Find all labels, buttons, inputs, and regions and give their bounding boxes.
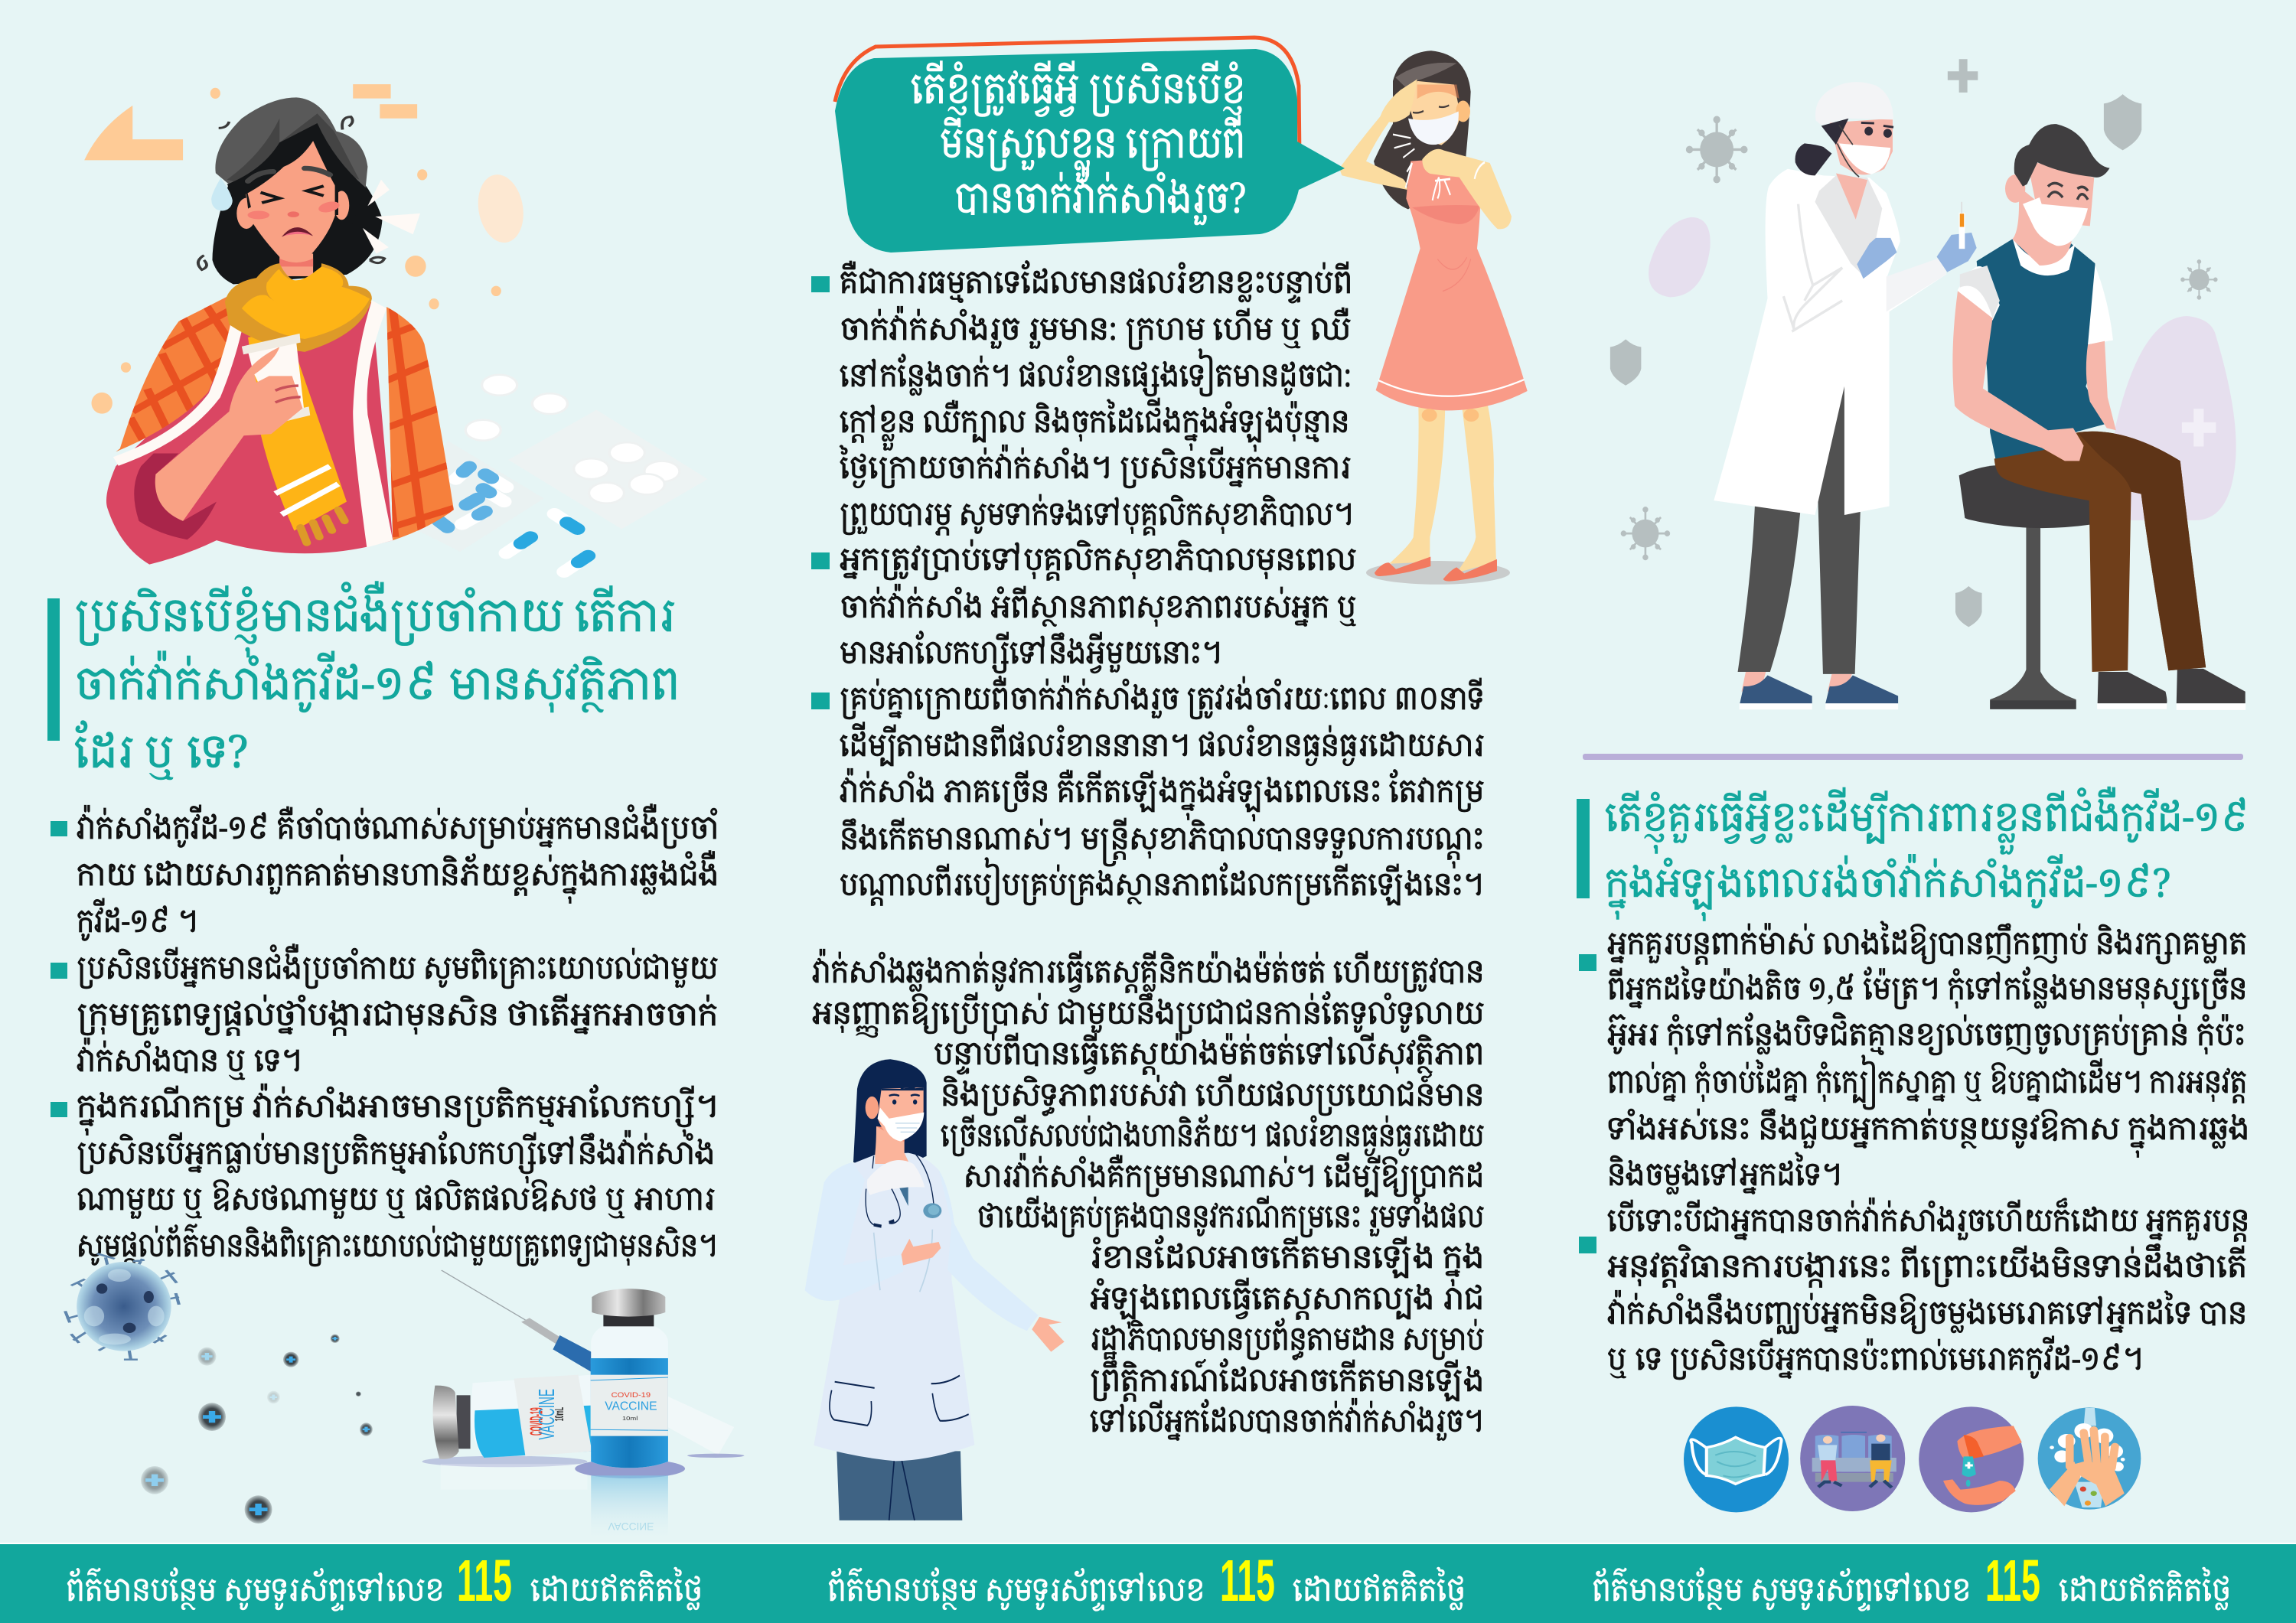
callout: speech bubble question: មិនស្រួលខ្លួន ក្រោយពី [940, 113, 1245, 182]
sweat drop [211, 178, 233, 211]
icon: hand washing [2038, 1407, 2141, 1510]
pills and blister packs [418, 375, 708, 572]
vial lying down: COVID-19 [526, 1407, 546, 1436]
scarf [225, 263, 372, 543]
heading: chronic illness question: ចាក់វ៉ាក់សាំងកូវីដ-១៩ មានសុវត្ថិភាព [74, 650, 680, 713]
medical plus particles [141, 1335, 373, 1524]
text block: vaccine safety paragraph: បន្ទាប់ពីបានធ្វើតេស្តយ៉ាងម៉ត់ចត់ទៅលើសុវត្ថិភាព [934, 1031, 1484, 1075]
vial standing [575, 1289, 685, 1542]
shawl [116, 295, 454, 547]
text block: side effects bullets: ថ្ងៃក្រោយចាក់វ៉ាក់សាំង។ ប្រសិនបើអ្នកមានការ [840, 444, 1351, 489]
vial lying down: 10mL [554, 1407, 566, 1421]
footer message 1: 115 [457, 1548, 512, 1614]
text block: side effects bullets: គឺជាការធម្មតាទេដែលមានផលរំខានខ្លះបន្ទាប់ពី [840, 260, 1352, 304]
text block: side effects bullets [811, 260, 1484, 906]
footer message 1 [66, 1548, 703, 1614]
text block: side effects bullets: ក្តៅខ្លួន ឈឺក្បាល និងចុកដៃជើងក្នុងអំឡុងប៉ុន្មាន [840, 397, 1349, 451]
hair [198, 97, 384, 284]
body [106, 302, 393, 565]
footer message 1: ព័ត៌មានបន្ថែម សូមទូរស័ព្ទទៅលេខ [66, 1567, 444, 1612]
face [236, 141, 349, 276]
callout: speech bubble question [835, 37, 1345, 253]
seated man [1952, 124, 2245, 710]
vial standing: COVID-19 [612, 1391, 651, 1399]
text block: left column bullets: ណាមួយ ឬ ឱសថណាមួយ ឬ ផលិតផលឱសថ ឬ អាហារ [77, 1177, 715, 1220]
text block: protection bullets: ទាំងអស់នេះ នឹងជួយអ្នកកាត់បន្ថយនូវឱកាស ក្នុងការឆ្លង [1607, 1106, 2249, 1157]
text block: protection bullets: វ៉ាក់សាំងនឹងបញ្ឈប់អ្នកមិនឱ្យចម្លងមេរោគទៅអ្នកដទៃ បាន [1607, 1289, 2247, 1334]
text block: left column bullets: សូមផ្តល់ព័ត៌មាននិងពិគ្រោះយោបល់ជាមួយគ្រូពេទ្យជាមុនសិន។ [77, 1224, 718, 1267]
hand with tube [155, 334, 310, 521]
text block: vaccine safety paragraph: រដ្ឋាភិបាលមានប្រព័ន្ធតាមដាន សម្រាប់ [1090, 1317, 1484, 1361]
stool [1959, 465, 2090, 709]
icons: prevention circles [1684, 1406, 2141, 1512]
heading bar left [47, 598, 60, 741]
footer message 3: ដោយឥតគិតថ្លៃ [2059, 1566, 2231, 1611]
decorative peach shapes [84, 84, 527, 414]
callout: speech bubble question: តើខ្ញុំត្រូវធ្វើអ្វី ប្រសិនបើខ្ញុំ [911, 59, 1245, 128]
heading: how to protect yourself: ក្នុងអំឡុងពេលរង់ចាំវ៉ាក់សាំងកូវីដ-១៩? [1605, 854, 2171, 921]
text block: left column bullets: កូវីដ-១៩ ។ [77, 898, 198, 942]
footer message 1: ដោយឥតគិតថ្លៃ [530, 1566, 703, 1611]
text block: vaccine safety paragraph: អំឡុងពេលធ្វើតេស្តសាកល្បង រាជ [1090, 1276, 1484, 1328]
pain marks [363, 180, 420, 253]
text block: side effects bullets: នឹងកើតមានណាស់។ មន្ត្រីសុខាភិបាលបានទទួលការបណ្តុះ [840, 816, 1484, 868]
text block: vaccine safety paragraph: ទៅលើអ្នកដែលបានចាក់វ៉ាក់សាំងរួច។ [1090, 1397, 1484, 1442]
text block: protection bullets: អ៊ូអរ កុំទៅកន្លែងបិទជិតគ្មានខ្យល់ចេញចូលគ្រប់គ្រាន់ កុំប៉ះ [1607, 1012, 2245, 1056]
vial lying down: VACCINE [535, 1389, 559, 1440]
text block: vaccine safety paragraph [812, 948, 1484, 1442]
vial standing: 10ml [622, 1416, 638, 1422]
legs [1389, 406, 1445, 564]
heading bar right [1577, 799, 1590, 898]
nurse [1714, 82, 1977, 709]
callout: speech bubble question: បានចាក់វ៉ាក់សាំងរួច? [955, 168, 1247, 226]
divider [1583, 754, 2243, 760]
vial standing: VACCINE [608, 1520, 654, 1532]
illustration: female doctor with stethoscope [805, 1059, 1065, 1520]
heading: chronic illness question: ដែរ ឬ ទេ? [74, 720, 249, 781]
text block: left column bullets: វ៉ាក់សាំងកូវីដ-១៩ គឺចាំបាច់ណាស់សម្រាប់អ្នកមានជំងឺប្រចាំ [77, 804, 719, 849]
syringe [442, 1270, 744, 1458]
illustration: sick woman with medicine [84, 84, 708, 572]
text block: vaccine safety paragraph: និងប្រសិទ្ធភាពរបស់វា ហើយផលប្រយោជន៍មាន [941, 1073, 1484, 1116]
text block: side effects bullets: មានអាលែកហ្សុីទៅនឹងអ្វីមួយនោះ។ [840, 631, 1222, 683]
text block: left column bullets: ប្រសិនបើអ្នកមានជំងឺប្រចាំកាយ សូមពិគ្រោះយោបល់ជាមួយ [77, 944, 718, 989]
text block: vaccine safety paragraph: សារវ៉ាក់សាំងគឺកម្រមានណាស់។ ដើម្បីឱ្យប្រាកដ [964, 1152, 1484, 1197]
footer message 3: 115 [1985, 1548, 2040, 1614]
text block: side effects bullets: ចាក់វ៉ាក់សាំង អំពីស្ថានភាពសុខភាពរបស់អ្នក ឬ [840, 583, 1358, 627]
face and mask [1408, 81, 1460, 145]
footer message 2: ដោយឥតគិតថ្លៃ [1293, 1566, 1466, 1611]
icon: hand sanitizer [1919, 1406, 2024, 1512]
text block: vaccine safety paragraph: ព្រឹត្តិការណ៍ដែលអាចកើតមានឡើង [1090, 1358, 1484, 1402]
dress [1376, 158, 1528, 411]
footer message 3 [1592, 1548, 2231, 1614]
text block: protection bullets [1579, 921, 2249, 1380]
heading: chronic illness question: ប្រសិនបើខ្ញុំមានជំងឺប្រចាំកាយ តើការ [74, 582, 675, 657]
text block: protection bullets: អ្នកគួរបន្តពាក់ម៉ាស់ លាងដៃឱ្យបានញឹកញាប់ និងរក្សាគម្លាត [1607, 921, 2247, 965]
text block: protection bullets: ឬ ទេ ប្រសិនបើអ្នកបានប៉ះពាល់មេរោគកូវីដ-១៩។ [1607, 1336, 2144, 1380]
text block: protection bullets: និងចម្លងទៅអ្នកដទៃ។ [1607, 1152, 1842, 1195]
background blobs, shields, virus icons [1610, 59, 2236, 627]
text block: vaccine safety paragraph: រំខានដែលអាចកើតមានឡើង ក្នុង [1090, 1235, 1484, 1286]
text block: left column bullets: ក្នុងករណីកម្រ វ៉ាក់សាំងអាចមានប្រតិកម្មអាលែកហ្សុី។ [77, 1083, 719, 1136]
sleeve and arm [134, 453, 217, 539]
text block: left column bullets: ប្រសិនបើអ្នកធ្លាប់មានប្រតិកម្មអាលែកហ្សុីទៅនឹងវ៉ាក់សាំង [77, 1129, 715, 1183]
icon: coronavirus [65, 1253, 179, 1360]
text block: left column bullets: ក្រុមគ្រូពេទ្យផ្តល់ថ្នាំបង្ការជាមុនសិន ថាតើអ្នកអាចចាក់ [77, 992, 718, 1036]
icon: physical distance on seats [1800, 1406, 1905, 1511]
vial standing: VACCINE [605, 1400, 657, 1413]
illustration: woman in pink dress with headache [1339, 51, 1528, 585]
text block: protection bullets: អនុវត្តវិធានការបង្ការនេះ ពីព្រោះយើងមិនទាន់ដឹងថាតើ [1607, 1243, 2247, 1288]
text block: vaccine safety paragraph: ច្រើនលើសលប់ជាងហានិភ័យ។ ផលរំខានធ្ងន់ធ្ងរដោយ [941, 1113, 1484, 1157]
text block: side effects bullets: ដើម្បីតាមដានពីផលរំខាននានា។ ផលរំខានធ្ងន់ធ្ងរដោយសារ [840, 722, 1484, 767]
text block: left column bullets [51, 804, 719, 1267]
footer message 2 [827, 1548, 1466, 1614]
text block: side effects bullets: វ៉ាក់សាំង ភាគច្រើន គឺកើតឡើងក្នុងអំឡុងពេលនេះ តែវាកម្រ [840, 768, 1484, 821]
footer band [0, 1543, 2296, 1623]
footer message 3: ព័ត៌មានបន្ថែម សូមទូរស័ព្ទទៅលេខ [1592, 1567, 1971, 1612]
text block: left column bullets: វ៉ាក់សាំងបាន ឬ ទេ។ [77, 1037, 302, 1081]
text block: vaccine safety paragraph: ថាយើងគ្រប់គ្រងបាននូវករណីកម្រនេះ រួមទាំងផល [977, 1194, 1484, 1237]
icon: face mask [1684, 1406, 1789, 1512]
text block: protection bullets: បើទោះបីជាអ្នកបានចាក់វ៉ាក់សាំងរួចហើយក៏ដោយ អ្នកគួរបន្ត [1607, 1197, 2249, 1242]
heading: how to protect yourself [1605, 787, 2249, 921]
illustration: virus and vaccine vials [65, 1253, 744, 1542]
text block: side effects bullets: នៅកន្លែងចាក់។ ផលរំខានផ្សេងទៀតមានដូចជា: [840, 348, 1352, 396]
heading: how to protect yourself: តើខ្ញុំគួរធ្វើអ្វីខ្លះដើម្បីការពារខ្លួនពីជំងឺកូវីដ-១៩ [1605, 787, 2249, 854]
footer message 2: 115 [1220, 1548, 1275, 1614]
footer message 2: ព័ត៌មានបន្ថែម សូមទូរស័ព្ទទៅលេខ [827, 1567, 1205, 1612]
arms [1339, 80, 1417, 190]
heading: chronic illness question [74, 582, 680, 781]
vial lying down [422, 1375, 592, 1490]
text block: side effects bullets: អ្នកត្រូវប្រាប់ទៅបុគ្គលិកសុខាភិបាលមុនពេល [840, 537, 1356, 581]
text block: vaccine safety paragraph: អនុញ្ញាតឱ្យប្រើប្រាស់ ជាមួយនឹងប្រជាជនកាន់តែទូលំទូលាយ [812, 991, 1484, 1038]
text block: left column bullets: កាយ ដោយសារពួកគាត់មានហានិភ័យខ្ពស់ក្នុងការឆ្លងជំងឺ [77, 851, 719, 903]
text block: side effects bullets: បណ្តាលពីរបៀបគ្រប់គ្រងស្ថានភាពដែលកម្រកើតឡើងនេះ។ [840, 857, 1484, 906]
text block: side effects bullets: ព្រួយបារម្ភ សូមទាក់ទងទៅបុគ្គលិកសុខាភិបាល។ [840, 492, 1354, 536]
text block: side effects bullets: ចាក់វ៉ាក់សាំងរួច រួមមាន: ក្រហម ហើម ឬ ឈឺ [840, 305, 1351, 350]
illustration: nurse vaccinating seated man [1610, 59, 2245, 710]
text block: side effects bullets: គ្រប់គ្នាក្រោយពីចាក់វ៉ាក់សាំងរួច ត្រូវរង់ចាំរយៈពេល ៣០នាទី [840, 675, 1484, 719]
text block: vaccine safety paragraph: វ៉ាក់សាំងឆ្លងកាត់នូវការធ្វើតេស្តគ្លីនិកយ៉ាងម៉ត់ចត់ ហើយត្រូវបាន [812, 948, 1484, 993]
